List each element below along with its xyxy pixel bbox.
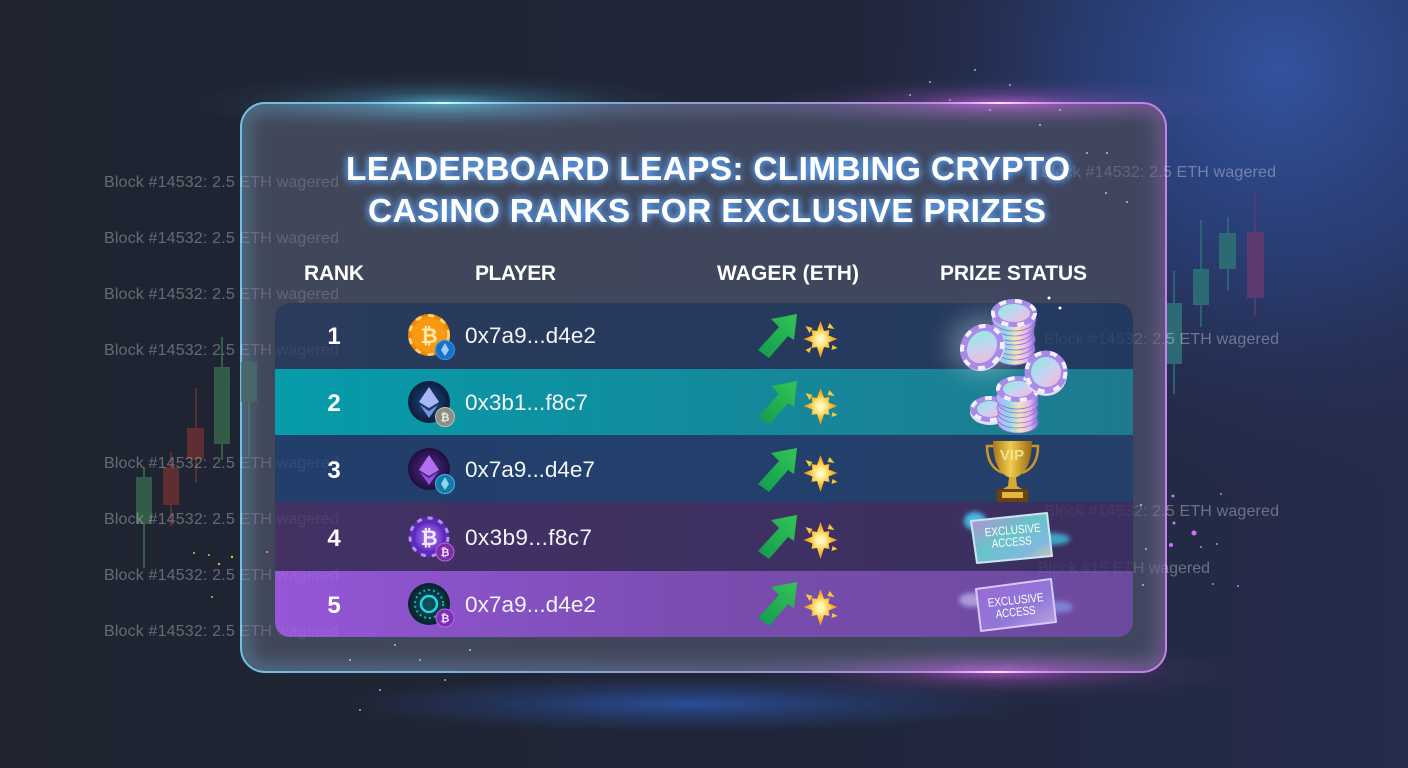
table header: RANK	[304, 262, 364, 285]
panel see-through details	[241, 109, 1147, 661]
panel edge glows	[193, 73, 1247, 700]
wager indicator 1: arrow and burst	[758, 314, 838, 358]
rank numbers	[327, 323, 341, 619]
scrolling ghost text: left	[104, 174, 339, 640]
table header: PLAYER	[475, 262, 556, 285]
wallet address 4: 0x3b9...f8c7	[465, 525, 592, 550]
title: LEADERBOARD LEAPS: CLIMBING CRYPTO	[346, 151, 1070, 188]
prize 3: VIP trophy: VIP	[1000, 447, 1024, 464]
glass panel	[241, 103, 1166, 672]
prize 5: exclusive access card	[959, 579, 1073, 631]
scrolling ghost text: right: Block #14532: 2.5 ETH wagered	[1044, 331, 1279, 348]
scrolling ghost text: right: Block #15 ETH wagered	[1038, 560, 1210, 577]
particles	[193, 69, 1239, 711]
title: CASINO RANKS FOR EXCLUSIVE PRIZES	[368, 193, 1046, 230]
table header	[304, 262, 1087, 285]
leaderboard rows background	[275, 303, 1133, 637]
prize 5: exclusive access card: EXCLUSIVE	[987, 590, 1044, 610]
scrolling ghost text: right: Block #14532: 2.5 ETH wagered	[1044, 503, 1279, 520]
table header: PRIZE STATUS	[940, 262, 1087, 285]
rank numbers: 5	[327, 592, 341, 619]
player icon 2: ethereum coin: ₿	[441, 412, 450, 424]
candlestick chart: right	[1166, 193, 1264, 394]
player icon 4: purple bitcoin chip: ₿	[441, 547, 450, 559]
title	[346, 151, 1070, 230]
player icon 1: bitcoin chip: ₿	[420, 325, 438, 348]
wallet address 3: 0x7a9...d4e7	[465, 457, 595, 482]
rank numbers: 4	[327, 525, 341, 552]
scrolling ghost text: left: Block #14532: 2.5 ETH wagered	[104, 342, 339, 359]
prize 5: exclusive access card: ACCESS	[995, 603, 1036, 621]
player icon 3: purple ethereum coin	[408, 448, 454, 494]
wager indicator 2: arrow and burst	[758, 381, 838, 425]
prize 4: exclusive access card: EXCLUSIVE	[984, 521, 1041, 539]
player icon 5: cyan ring token	[408, 583, 454, 627]
table header: WAGER (ETH)	[717, 262, 859, 285]
scrolling ghost text: left: Block #14532: 2.5 ETH wagered	[104, 455, 339, 472]
wallet address 1: 0x7a9...d4e2	[465, 323, 596, 348]
scrolling ghost text: right	[1038, 164, 1279, 577]
prize 2: chip stack	[970, 350, 1068, 433]
wager indicator 3: arrow and burst	[758, 448, 838, 492]
prize 4: exclusive access card: ACCESS	[991, 533, 1032, 551]
candlestick chart: left	[136, 337, 230, 568]
wager indicator 4: arrow and burst	[758, 515, 838, 559]
wallet address 5: 0x7a9...d4e2	[465, 592, 596, 617]
scrolling ghost text: left: Block #14532: 2.5 ETH wagered	[104, 567, 339, 584]
wallet address 2: 0x3b1...f8c7	[465, 390, 588, 415]
scrolling ghost text: left: Block #14532: 2.5 ETH wagered	[104, 174, 339, 191]
prize 1: chip stack	[949, 296, 1062, 380]
player icon 2: ethereum coin	[408, 381, 454, 426]
prize 4: exclusive access card	[964, 512, 1070, 563]
rank numbers: 3	[327, 457, 341, 484]
player icon 5: cyan ring token: ₿	[441, 613, 450, 625]
player icon 4: purple bitcoin chip: ₿	[420, 527, 438, 550]
scrolling ghost text: left: Block #14532: 2.5 ETH wagered	[104, 230, 339, 247]
prize 3: VIP trophy	[987, 441, 1038, 502]
player icon 1: bitcoin chip	[408, 314, 454, 360]
wager indicator 5: arrow and burst	[758, 582, 838, 626]
scrolling ghost text: left: Block #14532: 2.5 ETH wagered	[104, 623, 339, 640]
scrolling ghost text: left: Block #14532: 2.5 ETH wagered	[104, 286, 339, 303]
rank numbers: 2	[327, 390, 341, 417]
scrolling ghost text: left: Block #14532: 2.5 ETH wagered	[104, 511, 339, 528]
rank numbers: 1	[327, 323, 341, 350]
scrolling ghost text: right: Block #14532: 2.5 ETH wagered	[1041, 164, 1276, 181]
player icon 4: purple bitcoin chip	[409, 517, 454, 561]
